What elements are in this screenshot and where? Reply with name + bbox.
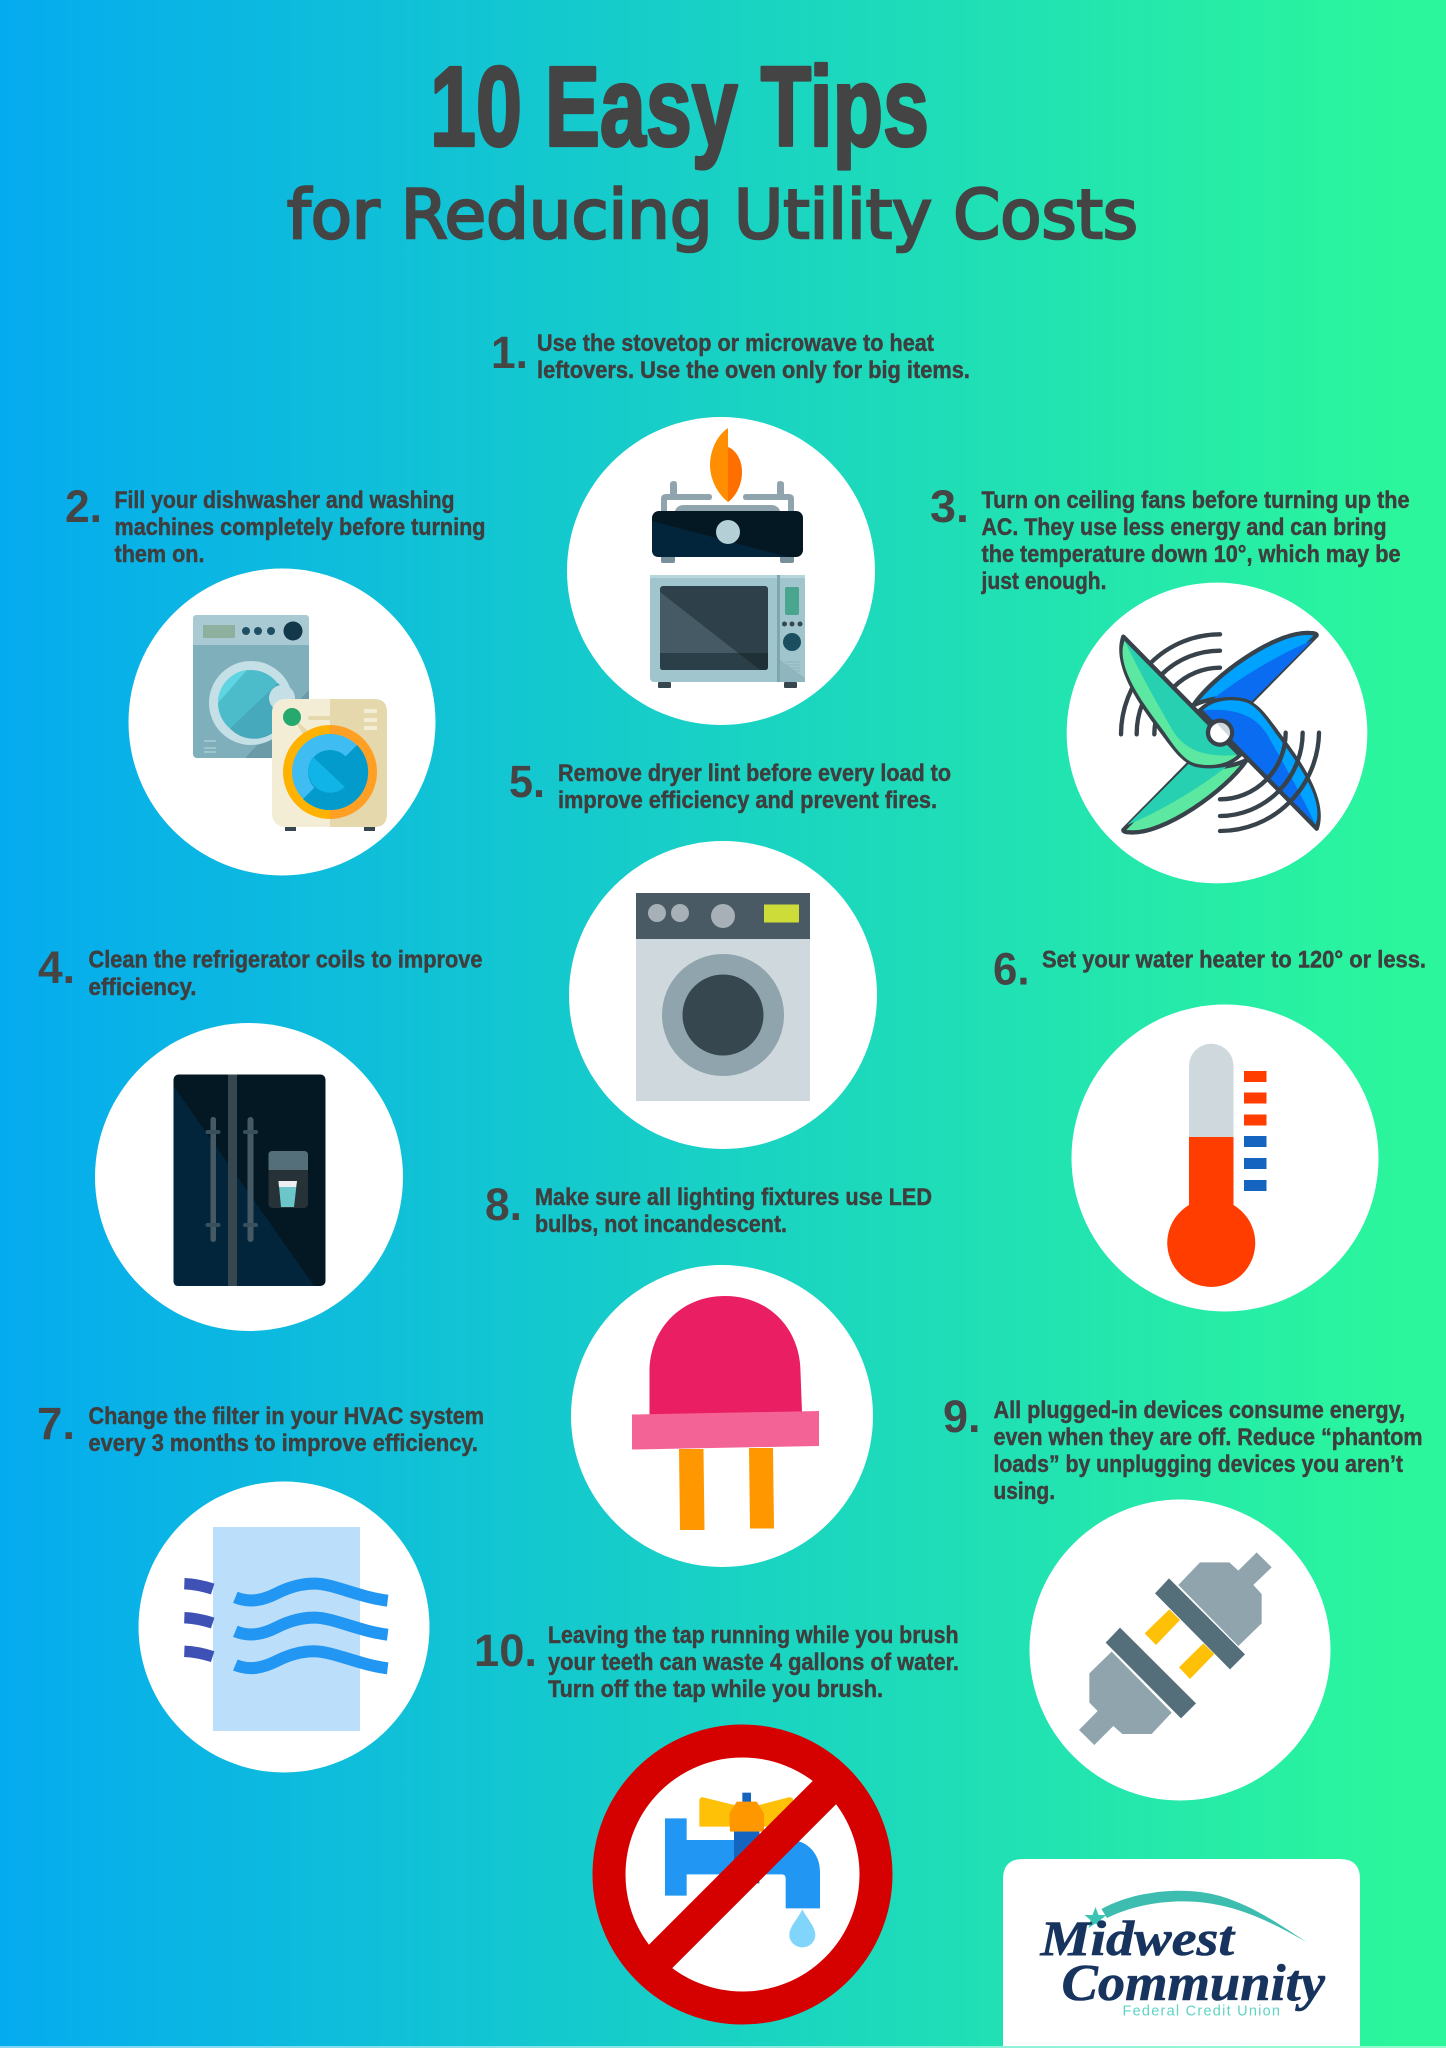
logo (1039, 1891, 1326, 2020)
logo: Community (1062, 1955, 1326, 2012)
green fan blades (1121, 637, 1247, 832)
tip 9 text: using. (994, 1478, 1055, 1505)
tip 7 text: every 3 months to improve efficiency. (88, 1430, 478, 1457)
tip 2 text: machines completely before turning (114, 514, 486, 541)
title (287, 44, 1138, 255)
tip 9 text: loads” by unplugging devices you aren’t (994, 1451, 1403, 1478)
tip 2 text: 2. (65, 481, 102, 532)
tip 7 text: 7. (37, 1398, 75, 1449)
tip 7 text (37, 1398, 484, 1457)
faucet (665, 1793, 820, 1947)
tip 10 text: your teeth can waste 4 gallons of water. (548, 1649, 959, 1676)
icon: plug (1030, 1500, 1330, 1800)
tip 8 text: Make sure all lighting fixtures use LED (535, 1184, 932, 1211)
tip 5 text: Remove dryer lint before every load to (558, 760, 951, 787)
icon: thermometer (1072, 1004, 1378, 1312)
tip 10 text: Turn off the tap while you brush. (548, 1676, 883, 1703)
icon: washing machines (128, 568, 436, 876)
prohibition ring and slash (609, 1741, 876, 2008)
tip 6 text: 6. (993, 944, 1030, 994)
blue fan blades (1193, 633, 1319, 829)
tip 6 text (993, 944, 1426, 994)
tip 3 text: just enough. (981, 568, 1106, 595)
panel: logo card (1003, 1859, 1360, 2046)
tip 9 text: All plugged-in devices consume energy, (994, 1397, 1405, 1424)
icon: stove and microwave (567, 417, 875, 725)
tip 5 text: 5. (509, 756, 545, 807)
tip 9 text (943, 1391, 1422, 1505)
tip 5 text: improve efficiency and prevent fires. (558, 787, 937, 814)
tip 4 text: 4. (38, 942, 75, 993)
tip 1 text: Use the stovetop or microwave to heat (537, 330, 934, 357)
tip 10 text (474, 1622, 959, 1703)
tip 4 text: efficiency. (88, 974, 196, 1001)
tip 8 text (485, 1179, 932, 1238)
tip 1 text (491, 327, 970, 384)
title: 10 Easy Tips (430, 44, 929, 170)
tip 3 text: the temperature down 10°, which may be (982, 541, 1400, 568)
tip 7 text: Change the filter in your HVAC system (88, 1403, 484, 1430)
tip 4 text: Clean the refrigerator coils to improve (88, 946, 482, 974)
tip 2 text (65, 481, 486, 568)
logo: Midwest (1039, 1910, 1236, 1966)
icon: LED bulb (571, 1265, 873, 1567)
tip 3 text: AC. They use less energy and can bring (982, 514, 1386, 541)
tip 1 text: leftovers. Use the oven only for big items. (537, 357, 970, 384)
icon: dryer (569, 841, 877, 1149)
tip 3 text (930, 481, 1410, 595)
icon: HVAC filter (138, 1482, 430, 1772)
tip 3 text: 3. (930, 481, 969, 532)
tip 2 text: them on. (114, 541, 204, 568)
icon: faucet with prohibition sign (609, 1741, 876, 2008)
title: for Reducing Utility Costs (287, 176, 1138, 255)
tip 1 text: 1. (491, 327, 528, 378)
tip 10 text: Leaving the tap running while you brush (548, 1622, 958, 1649)
tip 10 text: 10. (474, 1625, 537, 1676)
tip 2 text: Fill your dishwasher and washing (114, 487, 454, 514)
icon: ceiling fan (1067, 583, 1367, 883)
icon: refrigerator (95, 1023, 403, 1331)
tip 5 text (509, 756, 951, 814)
tip 8 text: bulbs, not incandescent. (535, 1211, 787, 1238)
tip 4 text (38, 942, 482, 1001)
tip 8 text: 8. (485, 1179, 522, 1230)
tip 3 text: Turn on ceiling fans before turning up the (982, 487, 1410, 514)
tip 9 text: 9. (943, 1391, 980, 1442)
logo: Federal Credit Union (1122, 2004, 1280, 2020)
